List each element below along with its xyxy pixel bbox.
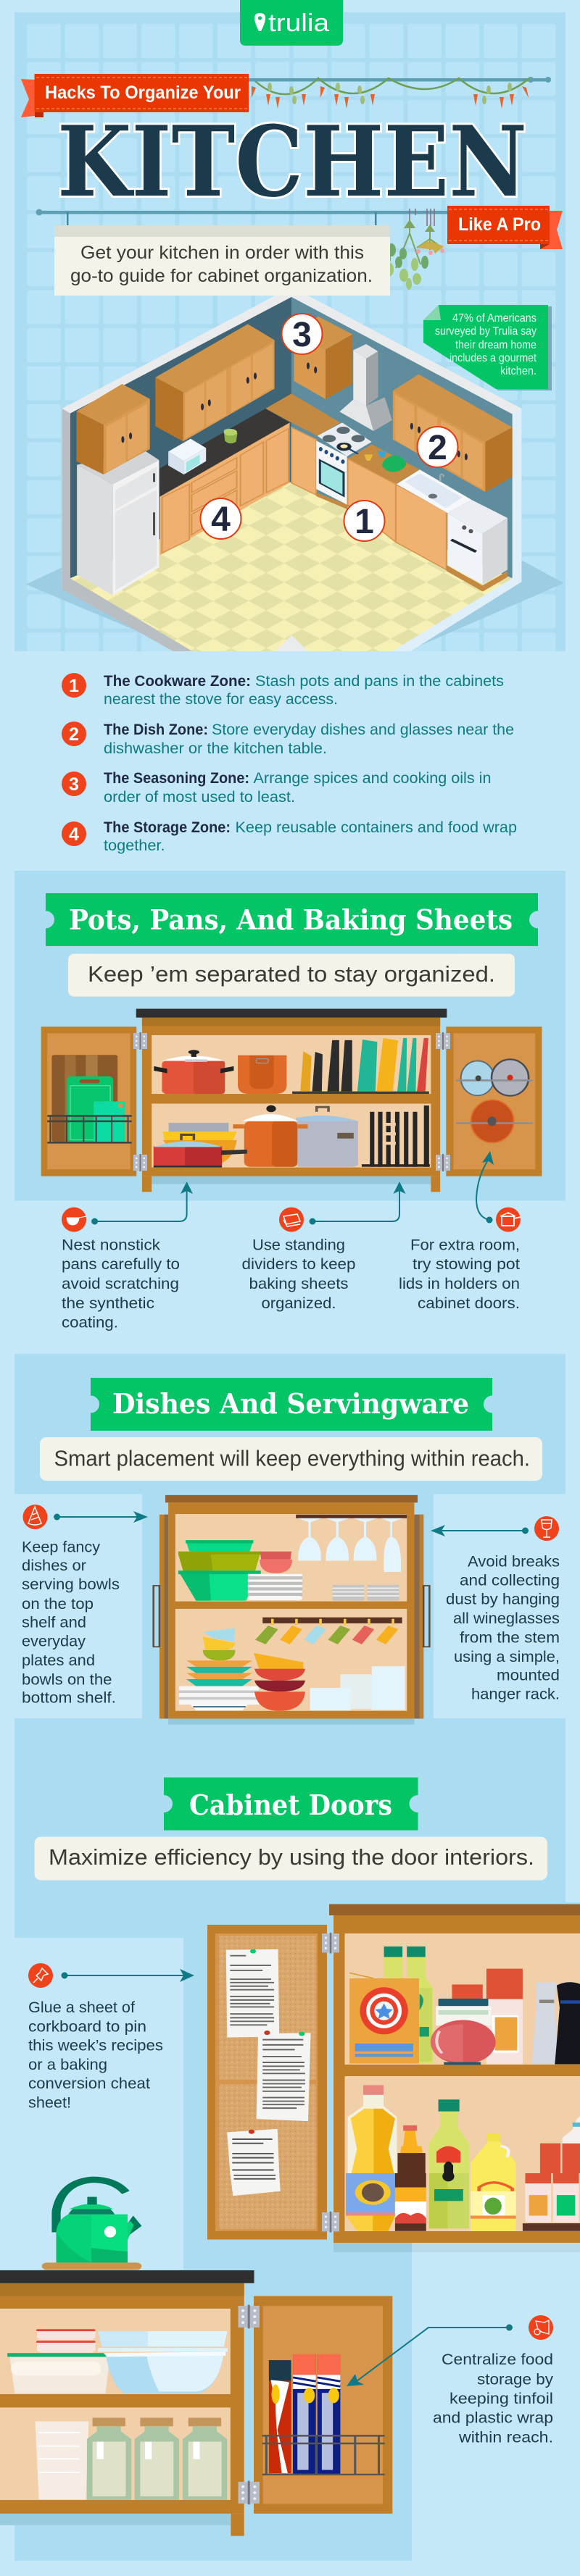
arrow: corkboard: [62, 1969, 194, 1982]
zone 4 description: The Storage Zone:: [104, 819, 231, 836]
sign: intro text: go-to guide for cabinet organization.: [70, 266, 373, 286]
upper cabinet hinges: [322, 1933, 339, 2233]
zone 3 description: The Seasoning Zone:: [104, 770, 249, 787]
tip: nest nonstick pans: avoid scratching: [62, 1276, 179, 1292]
tip: nest nonstick pans: Nest nonstick: [62, 1237, 161, 1253]
zone 2 description: The Dish Zone:: [104, 722, 208, 738]
tip: nest nonstick pans: coating.: [62, 1315, 118, 1331]
heading: Dishes And Servingware: [82, 1378, 501, 1431]
zone marker 4: 4: [211, 501, 231, 539]
sign: intro text: [54, 225, 390, 296]
zone 2 description: 2: [69, 724, 79, 745]
arrow: standing dividers: [310, 1182, 406, 1224]
callout: survey statistic note: their dream home: [455, 339, 536, 351]
cabinet hinges: [133, 1032, 450, 1171]
heading: Pots, Pans, And Baking Sheets: [37, 893, 547, 946]
zone 1 description: 1: [69, 676, 79, 696]
foil and plastic wrap boxes: [262, 2354, 385, 2475]
tip: wineglasses: and collecting: [460, 1572, 560, 1589]
tip: wineglasses: [446, 1516, 560, 1702]
rail with carrot garland: [249, 77, 551, 109]
panel: header tiled wall: [14, 12, 566, 651]
tip: pot lid holders: For extra room,: [410, 1237, 520, 1253]
tip: wineglasses: dust by hanging: [446, 1592, 560, 1608]
tip: pot lid holders: cabinet doors.: [418, 1295, 520, 1312]
zone 1 description: Stash pots and pans in the cabinets: [255, 673, 504, 690]
tip: corkboard: this week’s recipes: [28, 2037, 163, 2054]
tip: wineglasses: Avoid breaks: [468, 1553, 560, 1570]
sign: intro text: Get your kitchen in order with this: [80, 243, 364, 263]
illustration: isometric kitchen: [26, 287, 564, 651]
top shelf pots: [154, 1050, 286, 1094]
ribbon: Hacks To Organize Your: [21, 74, 249, 117]
tip: fancy dishes: shelf and: [22, 1615, 86, 1631]
tip: standing dividers: organized.: [261, 1295, 336, 1312]
cups and jars: [35, 2418, 227, 2500]
arrow: wine rack: [431, 1525, 528, 1536]
title: KITCHEN: KITCHEN: [57, 104, 527, 219]
zone marker 1: 1: [355, 503, 374, 541]
heading: Dishes And Servingware: Dishes And Servingware: [112, 1387, 469, 1420]
ribbon: Like A Pro: Like A Pro: [458, 214, 541, 235]
tip: pot lid holders: [399, 1207, 521, 1312]
tip: fancy dishes: everyday: [22, 1633, 86, 1650]
lower cabinet hinges: [238, 2305, 260, 2504]
upper cabinet frame: [329, 1904, 580, 2252]
food storage containers: [7, 2329, 228, 2394]
spices and bottles on top shelf: [348, 1946, 580, 2173]
tip: corkboard: conversion cheat: [28, 2075, 150, 2092]
tip: pot lid holders: lids in holders on: [399, 1276, 520, 1292]
tip: corkboard: sheet!: [28, 2094, 71, 2111]
tip: wineglasses: hanger rack.: [471, 1686, 560, 1702]
zone 3 description: order of most used to least.: [104, 789, 295, 806]
bottom shelf pots and pans: [154, 1105, 358, 1168]
zone 1 description: nearest the stove for easy access.: [104, 691, 338, 708]
zone 4 description: 4: [69, 824, 79, 845]
zone 4 description: [62, 819, 517, 854]
callout: survey statistic note: includes a gourmet: [450, 352, 536, 364]
baking sheets on divider: [292, 1038, 429, 1094]
icon: foil roll: [529, 2315, 553, 2340]
tip: fancy dishes: serving bowls: [22, 1576, 120, 1593]
hanging wine glasses: [296, 1515, 407, 1572]
heading: Pots, Pans, And Baking Sheets: Pots, Pans, And Baking Sheets: [69, 903, 513, 936]
logo: trulia: trulia: [268, 9, 329, 37]
green and olive bowls: [178, 1540, 292, 1601]
callout: survey statistic note: kitchen.: [500, 365, 536, 377]
subheading pill: Maximize efficiency by using the door interiors.: [49, 1844, 534, 1870]
zone 3 description: Arrange spices and cooking oils in: [254, 770, 492, 787]
corkboard door: [207, 1925, 327, 2240]
tip: wineglasses: using a simple,: [454, 1649, 560, 1665]
list: four kitchen zones: [62, 673, 517, 854]
tip: food storage: Centralize food: [442, 2351, 553, 2368]
icon: push pin: [28, 1963, 53, 1988]
zone 3 description: 3: [69, 774, 79, 795]
plates: [248, 1574, 399, 1601]
tip: food storage: keeping tinfoil: [450, 2391, 553, 2407]
bottles on bottom shelf, upper part: [348, 2085, 580, 2173]
lower cabinet frame: [0, 2270, 392, 2536]
callout: survey statistic note: [423, 305, 552, 390]
stacked cups, plates and bowls: [179, 1628, 305, 1711]
heading: Cabinet Doors: Cabinet Doors: [189, 1789, 392, 1821]
icon: party hat: [23, 1505, 48, 1529]
zone 4 description: together.: [104, 837, 165, 854]
tip: corkboard: Glue a sheet of: [28, 1999, 135, 2016]
last recipe sheet bottom: [230, 2173, 281, 2196]
tip: nest nonstick pans: the synthetic: [62, 1295, 154, 1312]
zone 1 description: [62, 673, 504, 708]
illustration: open cookware cabinet: [41, 1009, 542, 1192]
tip: fancy dishes: plates and: [22, 1652, 95, 1669]
zone marker 2: [418, 427, 458, 467]
ribbon: Hacks To Organize Your: Hacks To Organize Your: [45, 83, 241, 103]
callout: survey statistic note: surveyed by Trulia say: [435, 325, 536, 338]
subheading pill: Keep ’em separated to stay organized.: [88, 961, 495, 987]
tip: wineglasses: all wineglasses: [453, 1610, 560, 1627]
panel: dishes and cabinet doors background: [0, 1354, 580, 2561]
pot lids on door: [456, 1059, 533, 1142]
cutting boards and rack: [47, 1055, 132, 1142]
tip: food storage: [433, 2315, 554, 2446]
icon: baking dish: [279, 1207, 304, 1231]
drinking glasses: [310, 1666, 405, 1710]
tip: pot lid holders: try stowing pot: [413, 1256, 520, 1273]
zone 4 description: Keep reusable containers and food wrap: [235, 819, 517, 836]
subheading pill: [40, 1437, 542, 1481]
tip: wineglasses: from the stem: [460, 1629, 560, 1646]
tip: fancy dishes: [22, 1505, 120, 1707]
tip: nest nonstick pans: [62, 1207, 180, 1331]
zone 2 description: Store everyday dishes and glasses near the: [212, 722, 514, 738]
tip: standing dividers: baking sheets: [249, 1276, 348, 1292]
zone 1 description: The Cookware Zone:: [104, 673, 251, 690]
illustration: dish cabinet: [154, 1495, 429, 1725]
icon: pot: [496, 1207, 521, 1231]
tip: fancy dishes: bowls on the: [22, 1672, 112, 1689]
tip: corkboard: or a baking: [28, 2057, 107, 2073]
tip: food storage: within reach.: [458, 2430, 553, 2446]
subheading pill: Smart placement will keep everything within reach.: [54, 1446, 530, 1471]
tip: corkboard: corkboard to pin: [28, 2018, 146, 2036]
tip: fancy dishes: bottom shelf.: [22, 1690, 116, 1707]
lower rail and hangers: [36, 209, 449, 230]
logo: trulia: [240, 0, 343, 46]
callout: survey statistic note: 47% of Americans: [452, 312, 536, 325]
arrow: top shelf: [54, 1511, 148, 1523]
zone 2 description: [62, 722, 514, 757]
icon: pan: [62, 1207, 86, 1231]
arrow: wrap storage: [347, 2325, 512, 2386]
panel: pots, pans, baking sheets background: [14, 871, 566, 1201]
icon: green kettle: [42, 2180, 141, 2270]
arrow: nest pans: [92, 1182, 193, 1224]
tip: standing dividers: Use standing: [252, 1237, 345, 1253]
zone 2 description: dishwasher or the kitchen table.: [104, 740, 327, 757]
lower part of shelf items: [346, 2171, 580, 2231]
subheading pill: [68, 954, 515, 997]
tip: fancy dishes: on the top: [22, 1596, 94, 1613]
pinned recipe sheets: [226, 1949, 311, 2173]
heading: Cabinet Doors: [155, 1778, 426, 1831]
tip: food storage: storage by: [477, 2372, 554, 2388]
tip: food storage: and plastic wrap: [433, 2410, 553, 2427]
zone marker 3: [281, 314, 322, 354]
zone marker 4: [200, 498, 241, 539]
icon: wine glass: [534, 1516, 559, 1541]
tip: corkboard: [28, 1963, 163, 2111]
tip: fancy dishes: Keep fancy: [22, 1539, 101, 1555]
tip: wineglasses: mounted: [497, 1668, 560, 1684]
hanging mugs: [255, 1618, 402, 1644]
zone marker 3: 3: [292, 316, 312, 354]
zone 3 description: [62, 770, 492, 806]
ribbon: Like A Pro: [447, 206, 563, 249]
zone marker 1: [344, 501, 384, 541]
icon: hanging herbs: [382, 209, 444, 290]
zone marker 2: 2: [428, 429, 447, 467]
tip: nest nonstick pans: pans carefully to: [62, 1256, 180, 1273]
subheading pill: [35, 1837, 547, 1881]
standing dividers: [362, 1105, 430, 1167]
tip: standing dividers: [242, 1207, 355, 1312]
arrow: lids: [476, 1151, 494, 1223]
tip: fancy dishes: dishes or: [22, 1557, 86, 1574]
tip: standing dividers: dividers to keep: [242, 1256, 355, 1273]
